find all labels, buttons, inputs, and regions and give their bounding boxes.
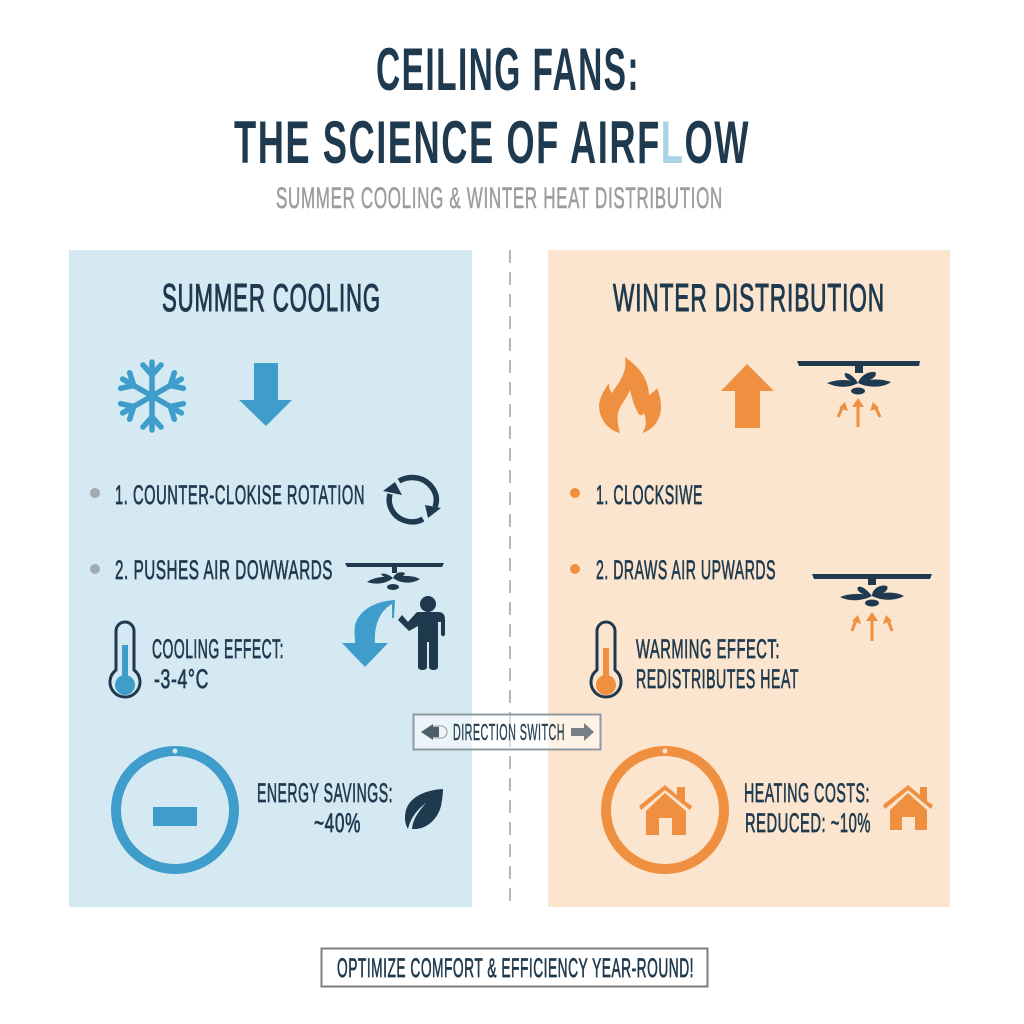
energy savings text: ~40% (314, 808, 361, 838)
icon: leaf (405, 789, 443, 829)
callout: optimize: OPTIMIZE COMFORT & EFFICIENCY YEAR-ROUND! (337, 953, 694, 983)
warming effect text: WARMING EFFECT: (636, 634, 780, 664)
bullet 2 (570, 555, 776, 585)
title: CEILING FANS: (376, 36, 640, 103)
panel: winter distribution (548, 250, 950, 907)
bullet 2 (90, 555, 333, 585)
icon: ceiling fan with arrows (797, 361, 920, 427)
bullet 2: 2. DRAWS AIR UPWARDS (596, 555, 776, 585)
heating costs text: HEATING COSTS: (744, 778, 870, 808)
icon: snowflake (118, 362, 186, 430)
heading: summer cooling: SUMMER COOLING (162, 277, 381, 320)
arrow: curved airflow down (342, 600, 395, 667)
heating costs text (744, 778, 871, 838)
callout: optimize (322, 948, 708, 986)
icon: ceiling fan with arrows 2 (812, 574, 932, 641)
cooling effect text: -3-4°C (154, 664, 209, 694)
bullet 1 (90, 480, 365, 510)
warming effect text: REDISTRIBUTES HEAT (636, 664, 799, 694)
icon: rotation arrows (383, 478, 441, 522)
cooling effect text (152, 634, 284, 694)
icon: left arrow (421, 724, 447, 740)
icon: ceiling fan (345, 563, 444, 590)
cooling effect text: COOLING EFFECT: (152, 634, 284, 664)
icon: right arrow (571, 723, 594, 741)
title (234, 36, 750, 176)
icon: person (398, 596, 445, 670)
heating costs text: REDUCED: ~10% (745, 808, 871, 838)
title: THE SCIENCE OF AIRFLOW (234, 109, 750, 176)
icon: house (883, 785, 933, 830)
icon: thermometer (591, 622, 621, 697)
bullet 1: 1. COUNTER-CLOKISE ROTATION (115, 480, 365, 510)
arrow: down (239, 363, 292, 426)
warming effect text (636, 634, 799, 694)
icon: house ring (606, 748, 724, 869)
bullet 1: 1. CLOCKSIWE (596, 480, 703, 510)
icon: minus ring (116, 748, 234, 869)
bullet 2: 2. PUSHES AIR DOWWARDS (115, 555, 333, 585)
direction switch: DIRECTION SWITCH (453, 719, 565, 745)
direction switch (414, 714, 600, 750)
energy savings text (257, 778, 393, 838)
bullet 1 (570, 480, 703, 510)
panel: summer cooling (69, 250, 472, 907)
arrow: up (721, 364, 774, 428)
icon: thermometer (110, 622, 140, 697)
energy savings text: ENERGY SAVINGS: (257, 778, 393, 808)
icon: flame (599, 357, 661, 433)
